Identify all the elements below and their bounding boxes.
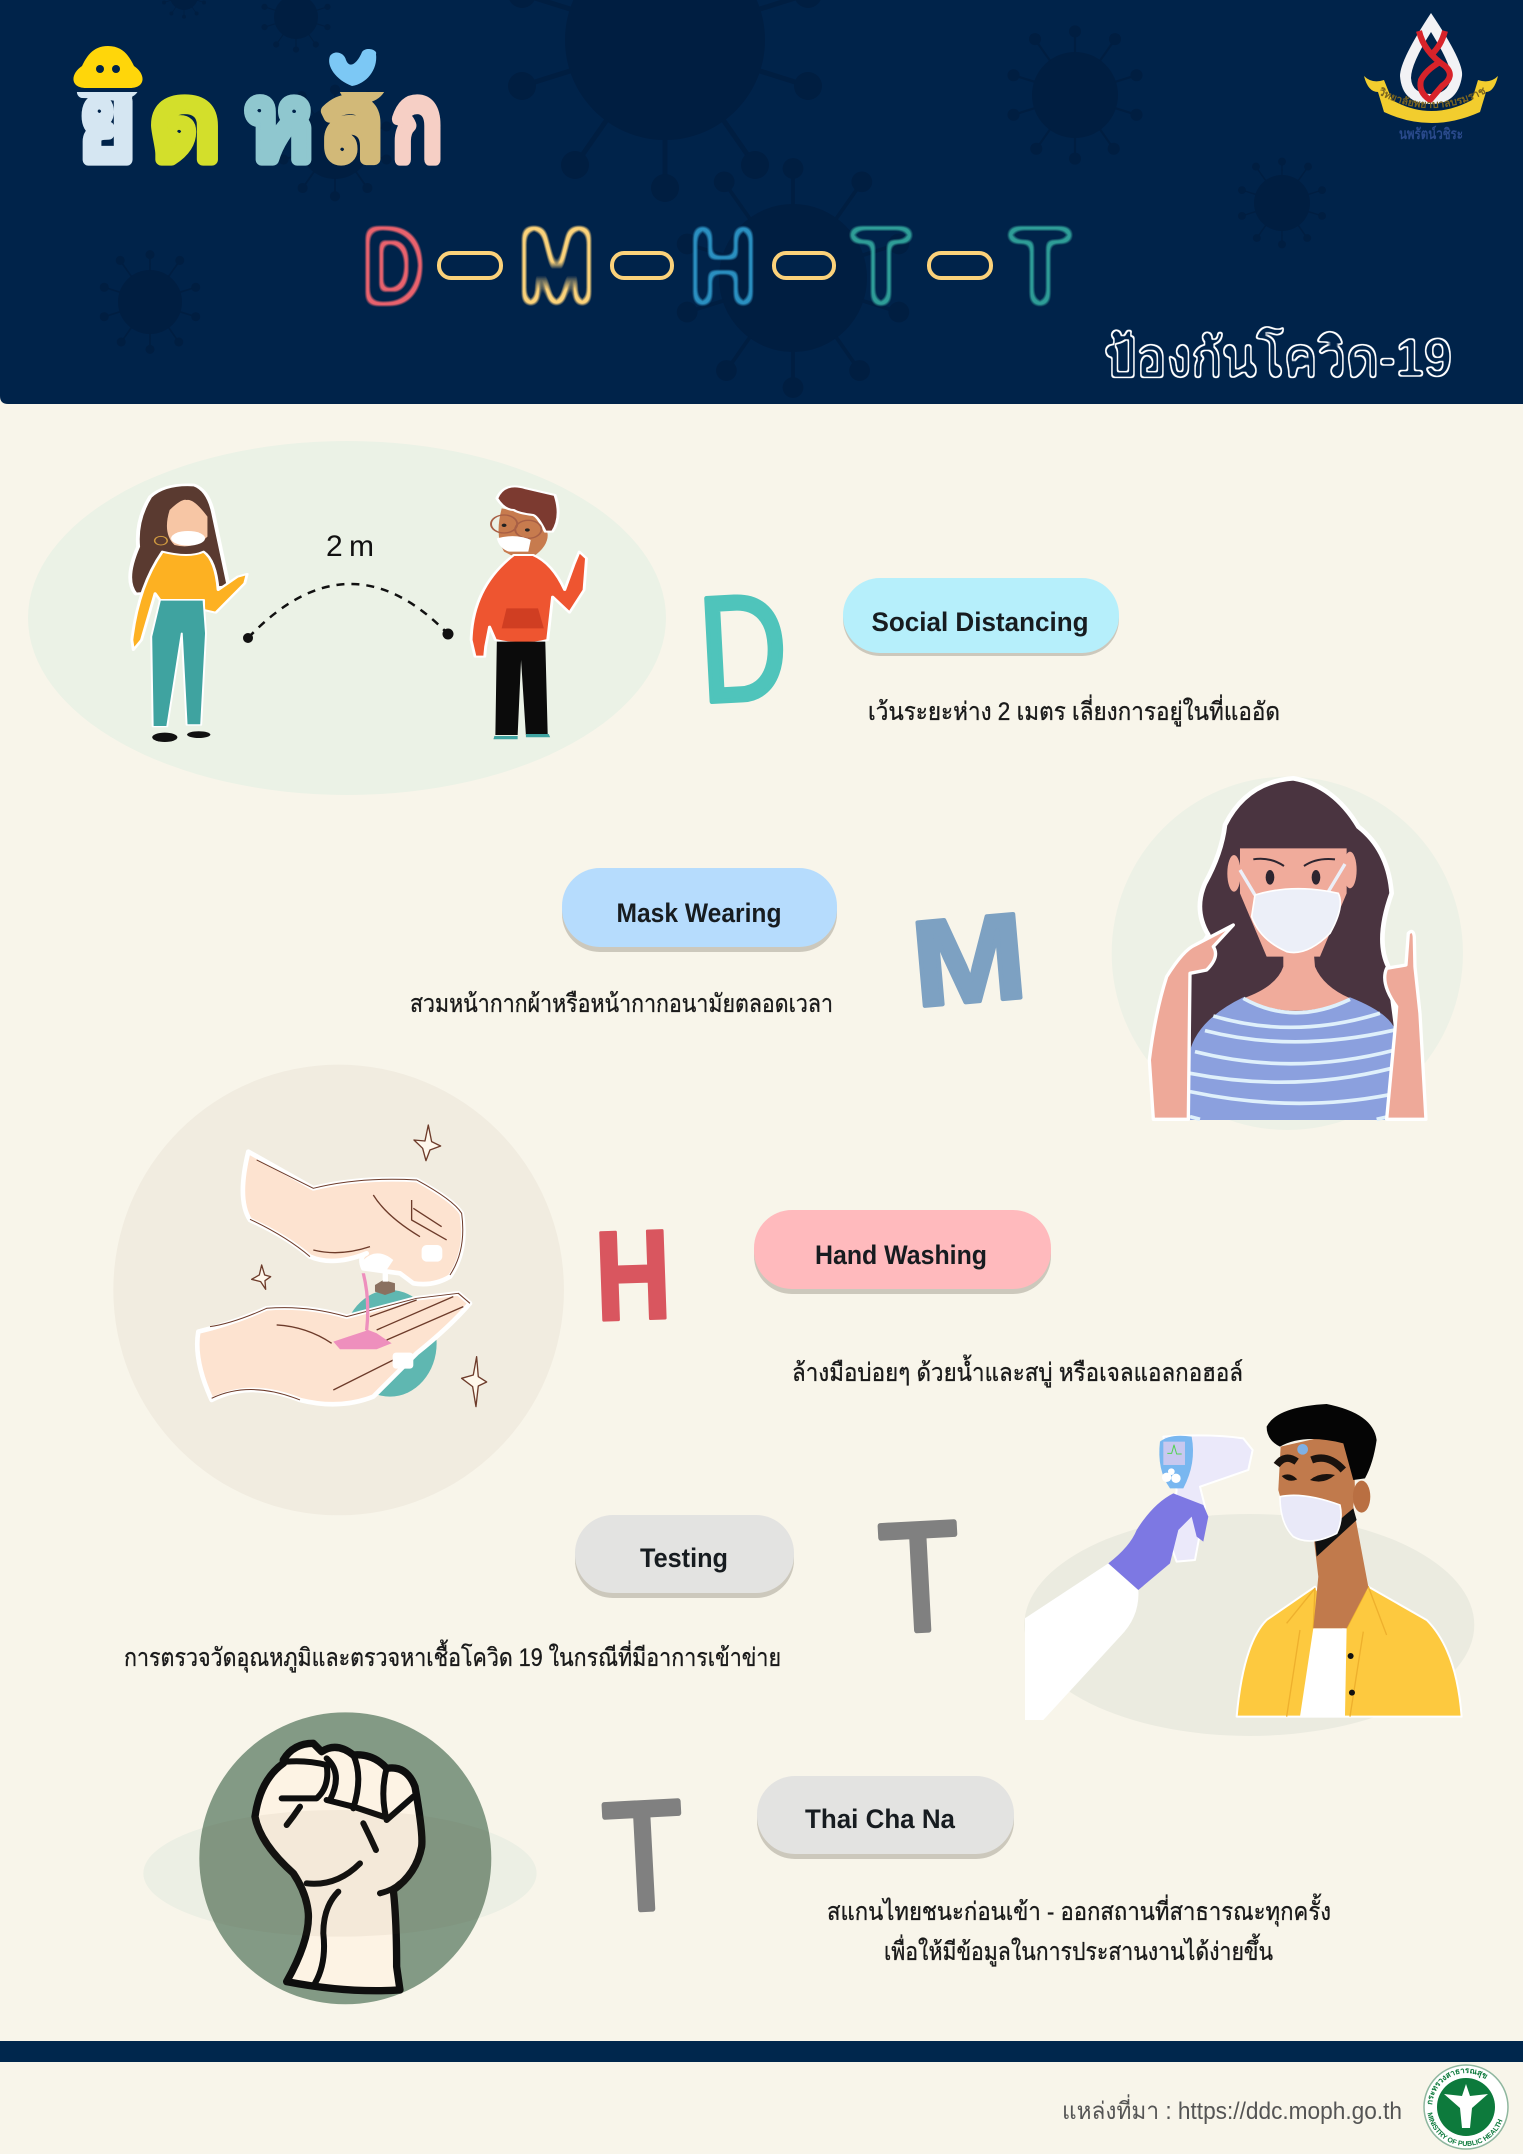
letter H: H xyxy=(593,1203,673,1347)
heading: D-M-H-T-T outlined xyxy=(363,205,1071,326)
pill: Hand Washing xyxy=(754,1210,1051,1294)
distance arc xyxy=(243,584,454,643)
title tone mark xyxy=(329,49,376,86)
college logo: นพรัตน์วชิระ xyxy=(1399,125,1463,143)
description: social distancing: เว้นระยะห่าง 2 เมตร เลี่ยงการอยู่ในที่แออัด xyxy=(868,694,1280,727)
header banner xyxy=(0,0,1523,404)
title: ยึดหลัก: ยึ xyxy=(79,66,136,182)
source line: แหล่งที่มา : https://ddc.moph.go.th xyxy=(1062,2094,1402,2125)
heading: D-M-H-T-T outlined: H xyxy=(690,205,756,326)
ministry of public health logo: MINISTRY OF PUBLIC HEALTH xyxy=(1428,2112,1502,2146)
pill: Social Distancing: Social Distancing xyxy=(872,607,1088,637)
footer bar xyxy=(0,2041,1523,2062)
college logo xyxy=(1364,13,1498,143)
man xyxy=(1237,1404,1462,1717)
pill: Social Distancing xyxy=(843,578,1119,656)
illustration: social distancing xyxy=(28,441,666,795)
title vowel mark xyxy=(73,46,143,88)
ministry of public health logo: กระทรวงสาธารณสุข xyxy=(1428,2068,1488,2104)
pill: Testing: Testing xyxy=(640,1543,728,1573)
man figure xyxy=(471,486,586,739)
letter T (thai cha na): T xyxy=(599,1768,688,1944)
mask xyxy=(1252,889,1340,953)
letter D: D xyxy=(695,562,791,734)
woman figure xyxy=(130,485,247,742)
hair xyxy=(1188,778,1397,1060)
heading: D-M-H-T-T outlined: M xyxy=(519,205,594,326)
lower hand xyxy=(197,1293,470,1404)
pill: Testing xyxy=(575,1515,794,1598)
description: thai cha na: สแกนไทยชนะก่อนเข้า - ออกสถานที่สาธารณะทุกครั้ง xyxy=(827,1893,1331,1927)
illustration: temperature check xyxy=(1024,1404,1474,1736)
face xyxy=(1227,848,1357,1011)
soap bottle xyxy=(343,1268,437,1397)
upper hand xyxy=(243,1152,463,1284)
description: hand washing: ล้างมือบ่อยๆ ด้วยน้ำและสบู่ หรือเจลแอลกอฮอล์ xyxy=(792,1354,1243,1388)
distance label: 2 m: 2 m xyxy=(326,530,374,563)
sparkles xyxy=(252,1125,487,1407)
letter T (testing): T xyxy=(876,1489,964,1665)
glove xyxy=(1108,1493,1208,1590)
ministry of public health logo xyxy=(1423,2064,1509,2150)
virus background pattern xyxy=(100,0,1326,398)
thermometer xyxy=(1159,1435,1253,1562)
pill: Thai Cha Na xyxy=(757,1776,1014,1859)
title: ยึดหลัก xyxy=(76,92,440,166)
description: mask wearing: สวมหน้ากากผ้าหรือหน้ากากอนามัยตลอดเวลา xyxy=(410,990,833,1018)
heading: D-M-H-T-T outlined: T xyxy=(851,205,911,326)
pill: Mask Wearing xyxy=(562,868,837,952)
doctor arm xyxy=(1025,1563,1138,1720)
pill: Thai Cha Na: Thai Cha Na xyxy=(805,1804,956,1834)
pill: Hand Washing: Hand Washing xyxy=(815,1240,987,1270)
subtitle: ป้องกันโควิด-19: ป้องกันโควิด-19 xyxy=(1104,326,1452,388)
heading: D-M-H-T-T outlined: T xyxy=(1009,205,1071,326)
shirt xyxy=(1189,997,1395,1120)
soap stream xyxy=(333,1273,392,1349)
title: ยึดหลัก: ห xyxy=(245,66,313,182)
title: ยึดหลัก: ก xyxy=(392,66,442,182)
right arm xyxy=(1385,931,1426,1119)
nails xyxy=(422,1245,442,1262)
fist xyxy=(255,1743,422,1991)
illustration: hand washing xyxy=(113,1065,564,1515)
description: testing: การตรวจวัดอุณหภูมิและตรวจหาเชื้อโควิด 19 ในกรณีที่มีอาการเข้าข่าย xyxy=(124,1639,781,1673)
illustration: raised fist xyxy=(143,1712,537,2004)
title: ยึดหลัก: ลั xyxy=(319,66,384,182)
heading: D-M-H-T-T outlined: D xyxy=(363,205,423,326)
description: thai cha na xyxy=(827,1893,1331,1967)
title: ยึดหลัก: ด xyxy=(150,66,220,182)
letter M: M xyxy=(906,887,1032,1033)
left arm xyxy=(1149,925,1233,1119)
description: thai cha na: เพื่อให้มีข้อมูลในการประสานงานได้ง่ายขึ้น xyxy=(884,1933,1273,1967)
illustration: mask wearing woman xyxy=(1112,777,1463,1130)
pill: Mask Wearing: Mask Wearing xyxy=(616,898,782,928)
